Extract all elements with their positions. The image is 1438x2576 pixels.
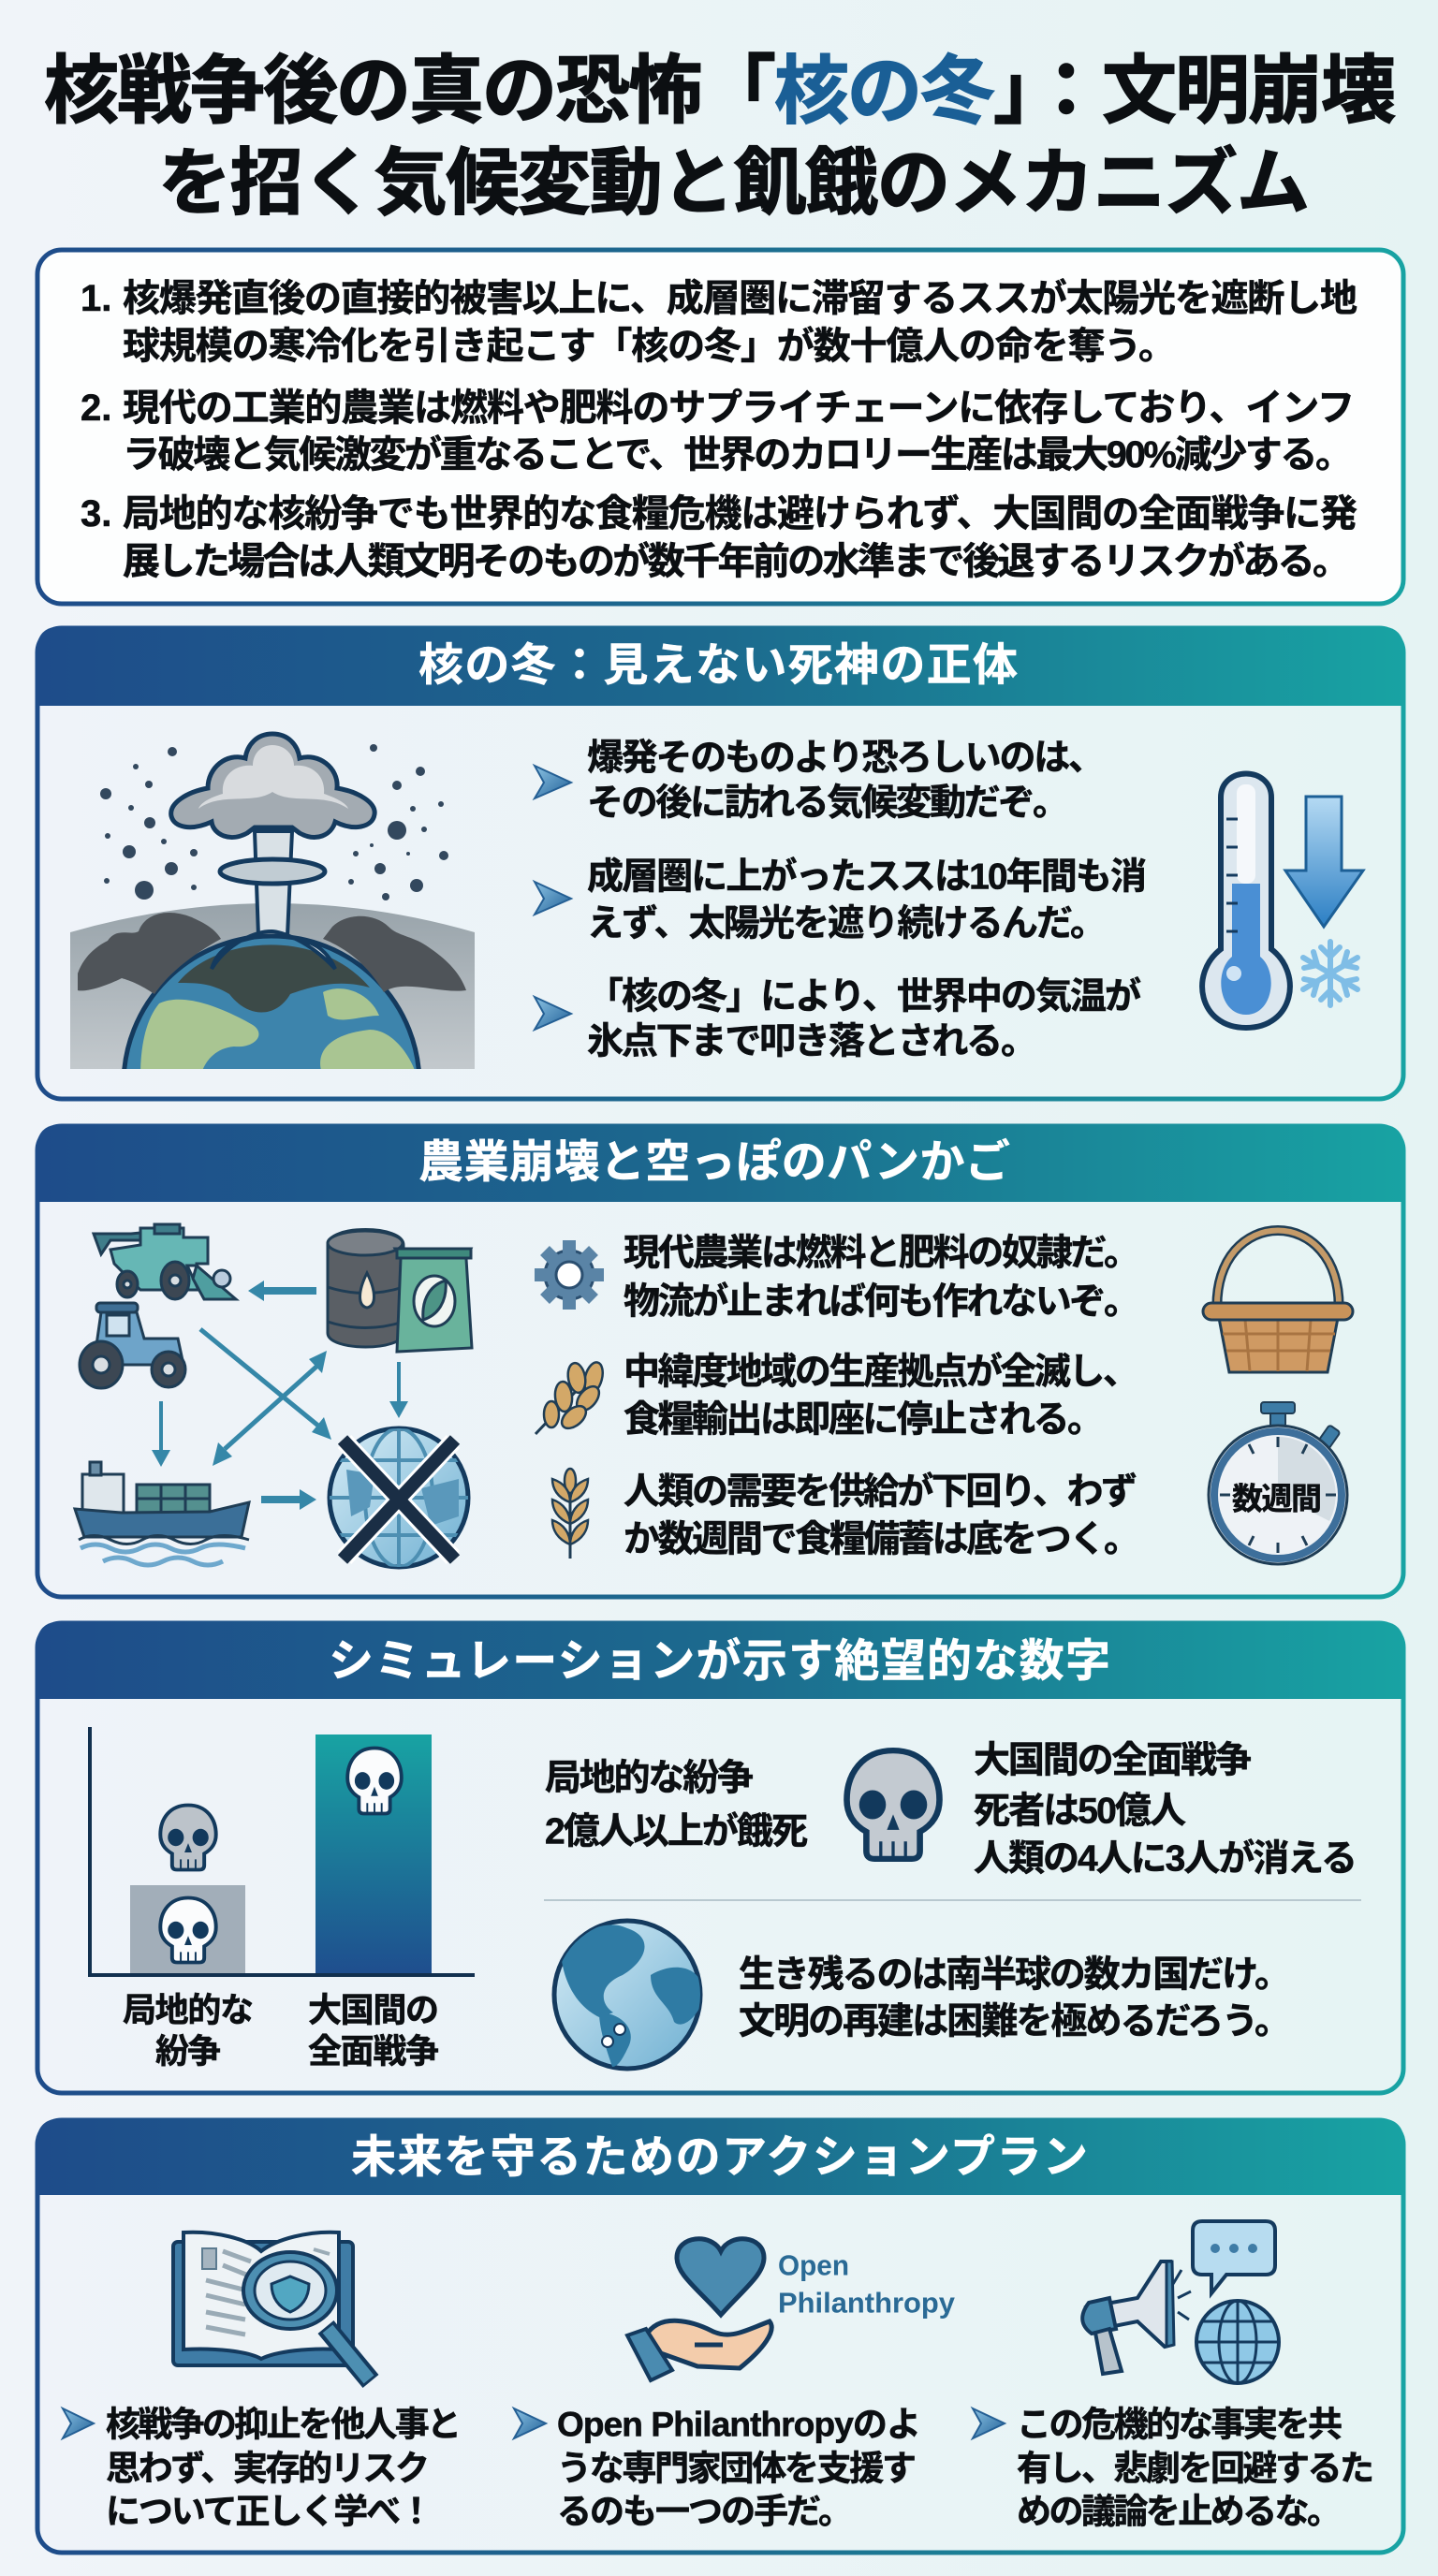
text: regional conflict stat: 2億人以上が餓死 (545, 1812, 808, 1852)
icon: cargo ship (75, 1462, 249, 1565)
icon: fertilizer bag (395, 1249, 472, 1352)
arrow bullet: action 3 (973, 2408, 1005, 2438)
summary point 1: 1. (81, 278, 111, 319)
text: action 1 (106, 2406, 462, 2531)
logo text: Open Philanthropy (778, 2248, 956, 2320)
arrow bullet 3 (535, 997, 571, 1030)
summary point 1 (81, 278, 1357, 367)
title (44, 49, 1396, 224)
axis label 1: 局地的な (123, 1990, 254, 2029)
heading: 農業崩壊と空っぽのパンかご (418, 1138, 1010, 1187)
summary point 2: 2. (81, 388, 111, 429)
icon: oil barrel (328, 1230, 404, 1347)
summary point 2 (81, 388, 1355, 476)
panel header (37, 2118, 1404, 2195)
summary point 3 (81, 493, 1357, 582)
text: survivors: 文明の再建は困難を極めるだろう。 (739, 2001, 1291, 2042)
summary point 3: 局地的な核紛争でも世界的な食糧危機は避けられず、大国間の全面戦争に発 (123, 493, 1357, 534)
summary point 3: 展した場合は人類文明そのものが数千年前の水準まで後退するリスクがある。 (123, 541, 1350, 582)
panel: simulation (37, 1621, 1404, 2093)
panel: summary (37, 250, 1403, 604)
summary point 1: 球規模の寒冷化を引き起こす「核の冬」が数十億人の命を奪う。 (123, 326, 1176, 367)
text: temperature: 「核の冬」により、世界中の気温が (587, 977, 1141, 1017)
axis label 1: 紛争 (155, 2031, 221, 2071)
panel header (37, 1124, 1404, 1202)
axis label 2 (308, 1990, 439, 2071)
text: global war stat: 人類の4人に3人が消える (974, 1838, 1357, 1880)
text: action 2: るのも一つの手だ。 (557, 2492, 853, 2531)
icon: wheat 1 (536, 1360, 606, 1434)
axis label 1 (123, 1990, 254, 2071)
axis label 2: 全面戦争 (308, 2031, 439, 2071)
text: fuel and fertiliser: 物流が止まれば何も作れないぞ。 (624, 1282, 1140, 1322)
text: explosion: 爆発そのものより恐ろしいのは、 (587, 738, 1105, 779)
arrow bullet 2 (535, 882, 571, 915)
text: action 3: 有し、悲劇を回避するた (1017, 2449, 1374, 2488)
icon: white skull in bar (160, 1897, 216, 1963)
bar: full-scale war (315, 1734, 432, 1974)
text: action 1: 核戦争の抑止を他人事と (106, 2406, 462, 2443)
text: soot: 成層圏に上がったススは10年間も消 (587, 857, 1147, 897)
icon: snowflake (1303, 942, 1357, 1005)
icon: heart in hand (627, 2239, 771, 2380)
text: action 2 (557, 2406, 921, 2531)
arrow bullet: action 1 (63, 2408, 94, 2438)
arrows: supply chain (152, 1281, 408, 1510)
summary point 1: 核爆発直後の直接的被害以上に、成層圏に滞留するススが太陽光を遮断し地 (123, 278, 1357, 319)
logo text: Open Philanthropy: Open (778, 2248, 849, 2282)
text: mid-latitudes: 中緯度地域の生産拠点が全滅し、 (624, 1352, 1139, 1393)
icon: stopwatch (1209, 1402, 1347, 1564)
text: action 2: うな専門家団体を支援す (557, 2449, 917, 2488)
icon: down arrow (1285, 797, 1363, 927)
axis label 2: 大国間の (308, 1990, 439, 2029)
text: global war stat: 大国間の全面戦争 (974, 1741, 1252, 1780)
text: temperature (587, 977, 1141, 1061)
text: action 3: この危機的な事実を共 (1017, 2406, 1343, 2443)
icon: white skull in tall bar (347, 1749, 402, 1814)
text: survivors (739, 1954, 1291, 2042)
arrow bullet: action 2 (514, 2408, 546, 2438)
text: global war stat (974, 1741, 1357, 1880)
text: action 1: について正しく学べ！ (106, 2492, 433, 2531)
text: soot: えず、太陽光を遮り続けるんだ。 (587, 904, 1107, 944)
icon: megaphone with speech bubble and globe (1082, 2221, 1279, 2383)
text: demand and supply: 人類の需要を供給が下回り、わず (624, 1471, 1137, 1513)
panel: agriculture (37, 1124, 1404, 1597)
text: explosion: その後に訪れる気候変動だぞ。 (587, 783, 1069, 824)
icon: mushroom cloud over earth (70, 732, 475, 1069)
text: soot (587, 857, 1147, 944)
arrow bullet 1 (535, 766, 571, 798)
icon: harvester (94, 1224, 236, 1299)
icon: large skull (846, 1750, 940, 1859)
text: demand and supply: か数週間で食糧備蓄は底をつく。 (624, 1520, 1140, 1559)
panel: action plan (37, 2118, 1404, 2553)
bar: regional conflict (130, 1885, 245, 1974)
icon: grey skull (160, 1805, 216, 1870)
bar chart (90, 1727, 475, 2071)
text: temperature: 氷点下まで叩き落とされる。 (587, 1022, 1037, 1061)
icon: empty basket (1203, 1230, 1353, 1372)
text: explosion (587, 738, 1105, 824)
icon: tractor (80, 1303, 185, 1388)
panel header (37, 626, 1404, 706)
icon: thermometer (1202, 773, 1290, 1028)
text: action 1: 思わず、実存的リスク (106, 2449, 430, 2488)
text: demand and supply (624, 1471, 1140, 1559)
title: 核戦争後の真の恐怖「核の冬」：文明崩壊 (44, 49, 1396, 133)
heading: シミュレーションが示す絶望的な数字 (329, 1636, 1110, 1687)
icon: crossed-out globe (330, 1428, 468, 1567)
heading: 核の冬：見えない死神の正体 (418, 640, 1018, 691)
text: global war stat: 死者は50億人 (974, 1792, 1186, 1831)
icon: southern hemisphere globe (554, 1921, 704, 2069)
icon: gear (535, 1240, 604, 1310)
icon: wheat 2 (552, 1469, 588, 1559)
text: regional conflict stat: 局地的な紛争 (545, 1758, 754, 1799)
text: survivors: 生き残るのは南半球の数カ国だけ。 (739, 1954, 1291, 1996)
heading: 未来を守るためのアクションプラン (351, 2132, 1088, 2183)
summary point 2: ラ破壊と気候激変が重なることで、世界のカロリー生産は最大90%減少する。 (123, 434, 1353, 476)
text: fuel and fertiliser: 現代農業は燃料と肥料の奴隷だ。 (624, 1234, 1140, 1273)
panel: nuclear winter (36, 625, 1406, 1101)
text: mid-latitudes: 食糧輸出は即座に停止される。 (624, 1400, 1104, 1440)
summary point 2: 現代の工業的農業は燃料や肥料のサプライチェーンに依存しており、インフ (123, 388, 1355, 429)
text: mid-latitudes (624, 1352, 1139, 1440)
text: fuel and fertiliser (624, 1234, 1140, 1322)
logo text: Open Philanthropy: Philanthropy (778, 2286, 956, 2320)
text: action 3 (1017, 2406, 1374, 2531)
text: action 2: Open Philanthropyのよ (557, 2406, 921, 2443)
icon: book and magnifier (173, 2232, 371, 2381)
text: action 3: めの議論を止めるな。 (1017, 2492, 1342, 2531)
panel header (37, 1621, 1404, 1699)
title: を招く気候変動と飢餓のメカニズム (158, 141, 1310, 224)
summary point 3: 3. (81, 493, 111, 534)
text: regional conflict stat (545, 1758, 808, 1852)
icon: stopwatch: 数週間 (1232, 1481, 1322, 1516)
